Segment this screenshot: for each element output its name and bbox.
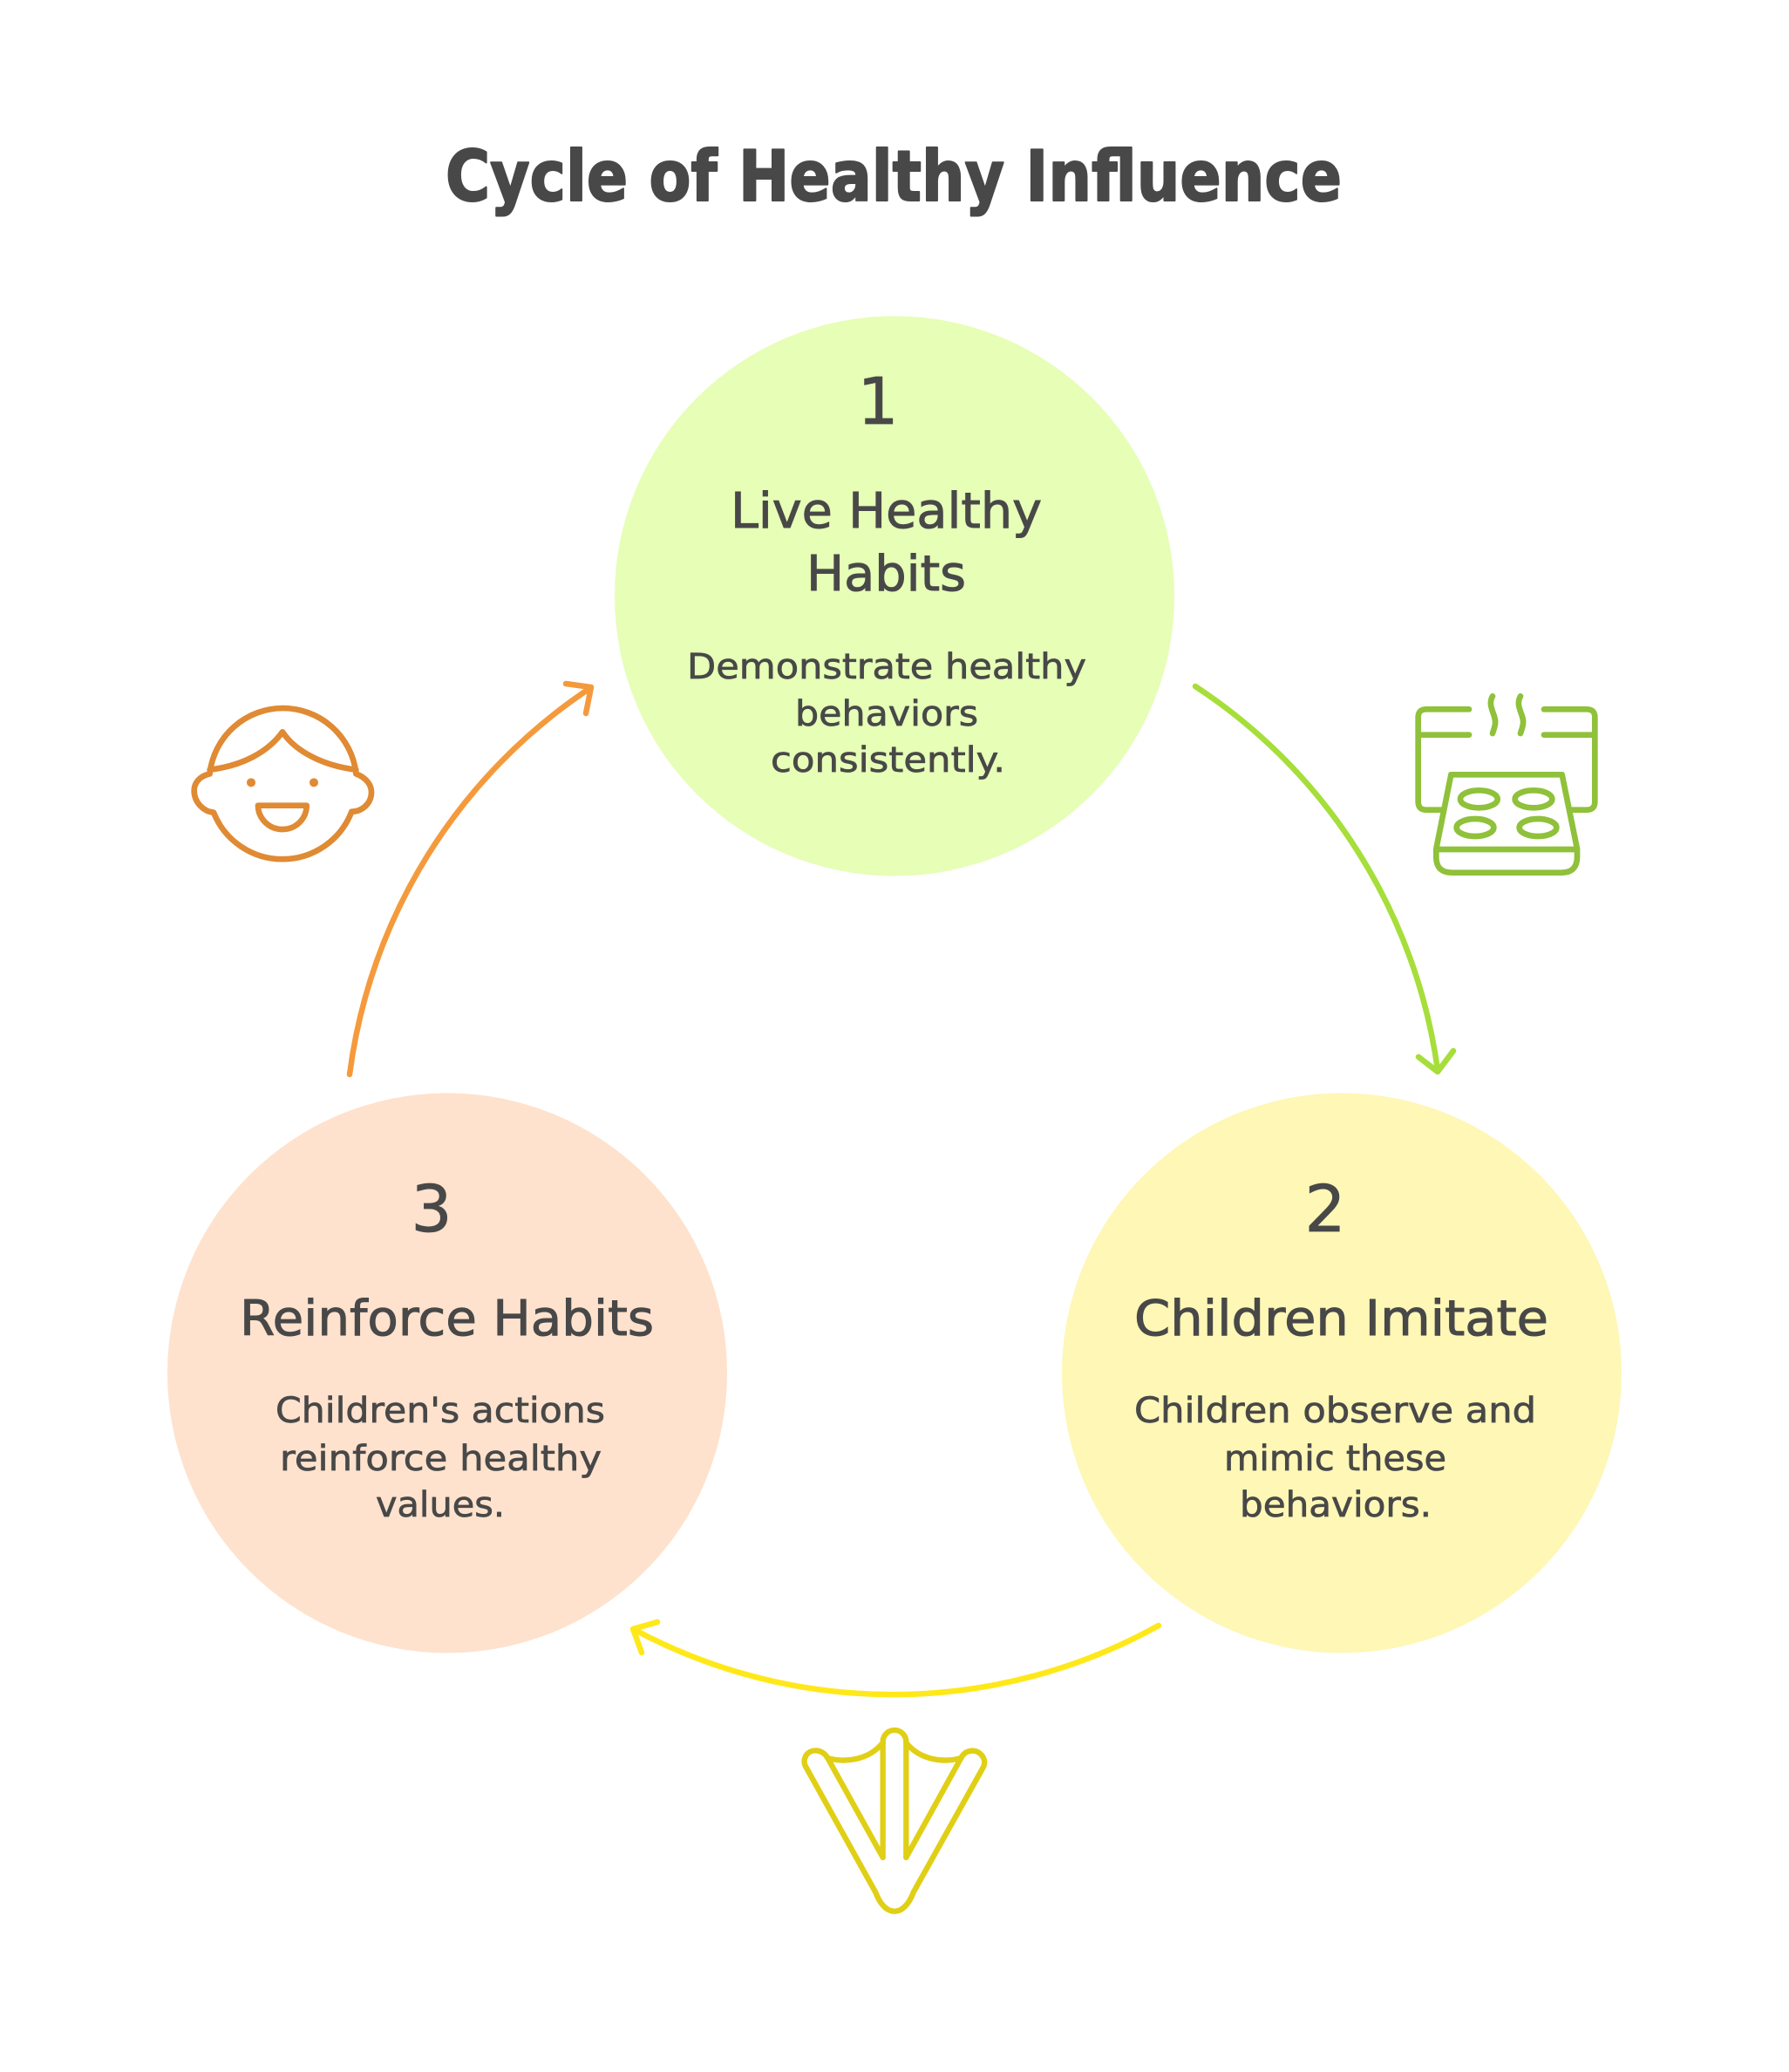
step 3 description: values. xyxy=(376,1485,505,1525)
step 1 description: Demonstrate healthy xyxy=(687,647,1086,687)
step 1 heading xyxy=(731,483,1042,603)
step 2 description: mimic these xyxy=(1224,1439,1446,1479)
step 3 description xyxy=(275,1391,605,1525)
step 2 heading: Children Imitate xyxy=(1134,1291,1548,1347)
panel: step 2 children imitate xyxy=(1062,1094,1622,1653)
icon: duck foot footprint xyxy=(805,1730,984,1912)
step 3 number: 3 xyxy=(411,1172,452,1247)
step 1 description: behaviors xyxy=(795,694,978,734)
arrow: step 3 to step 1 xyxy=(350,684,591,1074)
step 2 description: Children observe and xyxy=(1134,1391,1536,1431)
panel: step 3 reinforce habits xyxy=(167,1094,727,1653)
step 1 circle xyxy=(615,316,1174,876)
title: Cycle of Healthy Influence xyxy=(446,136,1342,217)
step 3 description: Children's actions xyxy=(275,1391,605,1431)
step 2 number: 2 xyxy=(1304,1172,1346,1247)
icon: smiling child face xyxy=(194,708,371,859)
step 2 description xyxy=(1134,1391,1536,1525)
step 1 heading: Live Healthy xyxy=(731,483,1042,540)
step 1 description: consistently. xyxy=(771,740,1005,780)
icon: oven with baking tray xyxy=(1418,696,1595,873)
step 1 heading: Habits xyxy=(806,546,966,603)
step 2 description: behaviors. xyxy=(1240,1485,1432,1525)
step 3 description: reinforce healthy xyxy=(280,1439,602,1479)
step 1 number: 1 xyxy=(857,365,899,440)
arrow: step 1 to step 2 xyxy=(1195,686,1453,1072)
step 2 circle xyxy=(1062,1094,1622,1653)
arrow: step 2 to step 3 xyxy=(633,1622,1159,1694)
panel: step 1 live healthy habits xyxy=(615,316,1174,876)
step 3 circle xyxy=(167,1094,727,1653)
step 1 description xyxy=(687,647,1086,780)
step 3 heading: Reinforce Habits xyxy=(240,1291,654,1347)
